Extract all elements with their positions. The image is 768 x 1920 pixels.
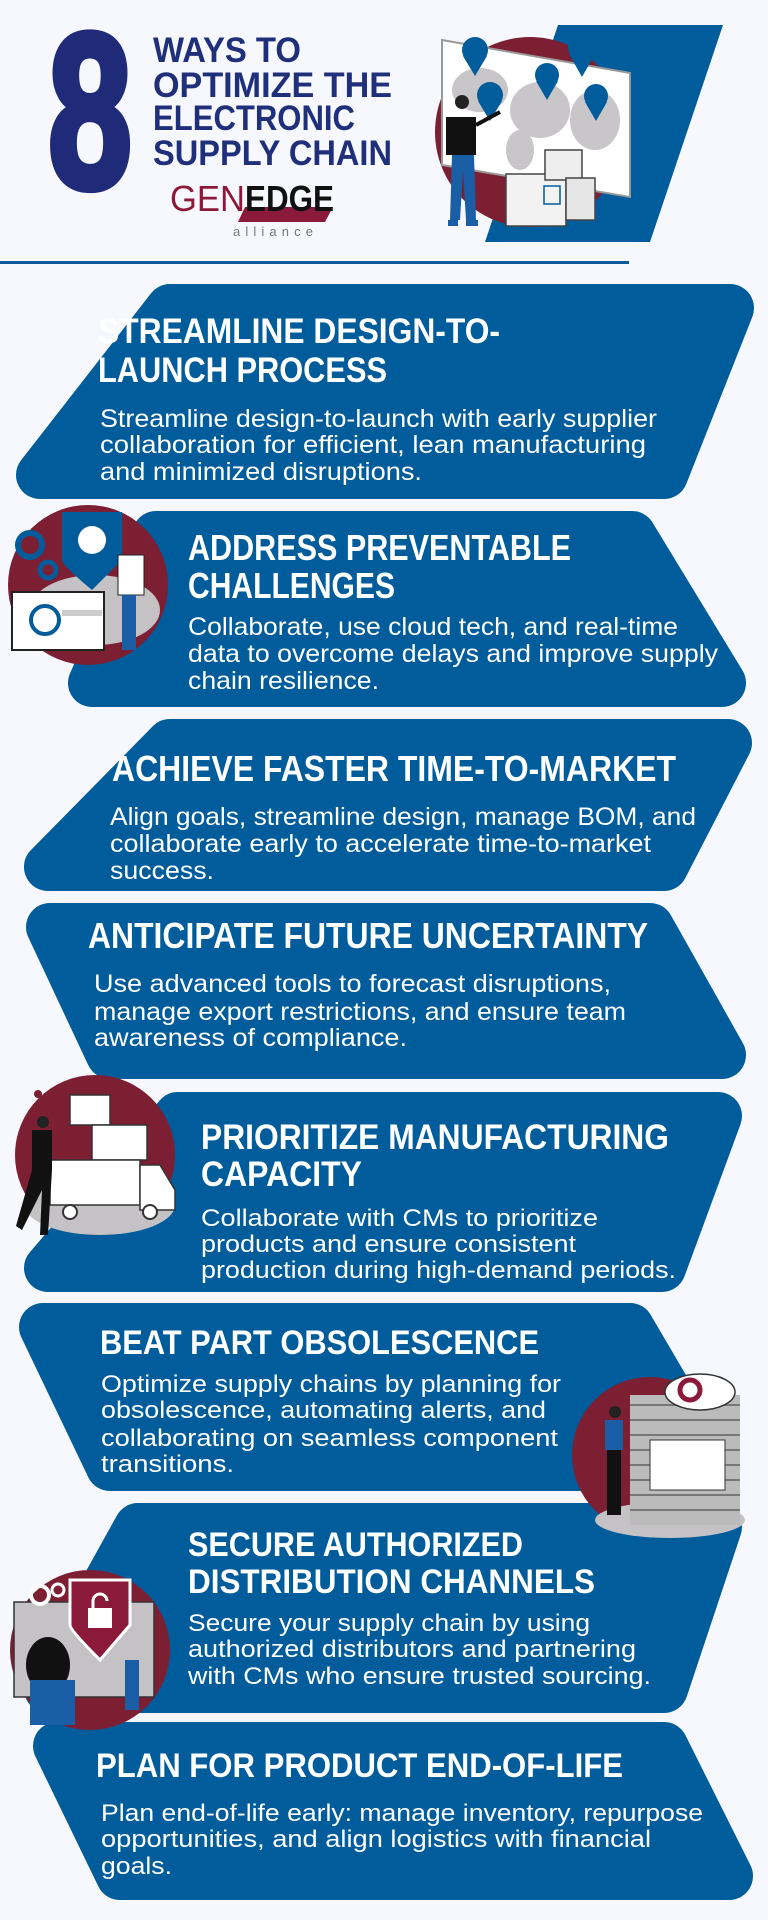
panel 3 text: collaborate early to accelerate time-to-market <box>110 830 651 858</box>
panel 7 shape <box>48 1527 718 1689</box>
panel 6 text: Optimize supply chains by planning for <box>101 1371 561 1398</box>
panel 4 text: manage export restrictions, and ensure team <box>94 998 626 1026</box>
panel 8 text: PLAN FOR PRODUCT END-OF-LIFE <box>96 1747 623 1785</box>
panel 3 shape <box>48 743 728 867</box>
panel 6 shape <box>43 1327 712 1467</box>
panel 5 illustration: truck and containers <box>15 1075 175 1235</box>
panel 7 illustration: security lock <box>10 1570 170 1730</box>
logo: GenEdge alliance: EDGE <box>245 178 334 219</box>
panel 6 text: collaborating on seamless component <box>101 1425 558 1452</box>
panel 3 text <box>110 748 696 885</box>
panel 1 text: collaboration for efficient, lean manufacturing <box>100 431 646 459</box>
logo: GenEdge alliance <box>170 178 334 239</box>
panel 6 text <box>100 1324 561 1478</box>
panel 7 text: Secure your supply chain by using <box>188 1610 590 1637</box>
panel 5 text <box>201 1118 676 1284</box>
panel 3 text: Align goals, streamline design, manage BOM, and <box>110 803 696 831</box>
title: OPTIMIZE THE <box>153 66 392 105</box>
panel 4 text: Use advanced tools to forecast disruptions, <box>94 970 611 998</box>
panel 2 illustration: cloud security <box>8 505 168 665</box>
panel 2 text: CHALLENGES <box>188 565 395 606</box>
illustration: logistics map <box>435 25 723 242</box>
panel 6 illustration: servers and cloud <box>572 1374 745 1538</box>
panel 5 text: Collaborate with CMs to prioritize <box>201 1205 598 1232</box>
panel 8 shape <box>57 1746 729 1876</box>
panel 1 text: STREAMLINE DESIGN-TO- <box>98 312 500 351</box>
panel 8 text: opportunities, and align logistics with financial <box>101 1826 651 1853</box>
panel 7 text: authorized distributors and partnering <box>188 1636 636 1663</box>
panel 2 shape <box>92 535 722 683</box>
panel 6 text: obsolescence, automating alerts, and <box>101 1397 546 1424</box>
panel 1 text: LAUNCH PROCESS <box>98 351 387 390</box>
panel 3 text: ACHIEVE FASTER TIME-TO-MARKET <box>112 748 676 789</box>
panel 8 text <box>96 1747 703 1880</box>
title: SUPPLY CHAIN <box>153 134 392 173</box>
panel 5 text: production during high-demand periods. <box>201 1257 676 1284</box>
panel 1 text <box>98 312 657 486</box>
panel 6 text: BEAT PART OBSOLESCENCE <box>100 1324 539 1362</box>
panel 5 text: CAPACITY <box>201 1155 362 1194</box>
title <box>153 31 392 173</box>
title: ELECTRONIC <box>153 99 355 138</box>
panel 5 text: PRIORITIZE MANUFACTURING <box>201 1118 669 1157</box>
panel 2 text: Collaborate, use cloud tech, and real-time <box>188 613 678 641</box>
divider <box>0 261 629 264</box>
panel 8 text: goals. <box>101 1853 172 1880</box>
panel 4 text <box>88 915 648 1052</box>
panel 1 shape <box>40 308 730 475</box>
panel 7 text <box>187 1526 651 1690</box>
panel 4 text: awareness of compliance. <box>94 1024 407 1052</box>
panel 6 text: transitions. <box>101 1451 234 1478</box>
panel 4 text: ANTICIPATE FUTURE UNCERTAINTY <box>88 915 648 956</box>
panel 7 text: with CMs who ensure trusted sourcing. <box>187 1663 651 1690</box>
panel 7 text: SECURE AUTHORIZED <box>188 1526 523 1564</box>
panel 4 shape <box>50 927 722 1055</box>
panel 2 text: ADDRESS PREVENTABLE <box>188 527 571 568</box>
panel 7 text: DISTRIBUTION CHANNELS <box>188 1563 595 1601</box>
panel 5 shape <box>48 1116 718 1268</box>
panel 3 text: success. <box>110 857 214 885</box>
panel 2 text <box>188 527 719 695</box>
panel 5 text: products and ensure consistent <box>201 1231 576 1258</box>
panel 2 text: chain resilience. <box>188 667 379 695</box>
panel 1 text: and minimized disruptions. <box>100 458 422 486</box>
panel 2 text: data to overcome delays and improve supply <box>188 640 719 668</box>
panel 1 text: Streamline design-to-launch with early supplier <box>100 405 657 433</box>
logo: GenEdge alliance: GEN <box>170 178 245 219</box>
title: WAYS TO <box>153 31 301 70</box>
panel 8 text: Plan end-of-life early: manage inventory, repurpose <box>101 1800 703 1827</box>
logo: GenEdge alliance: alliance <box>233 224 313 239</box>
